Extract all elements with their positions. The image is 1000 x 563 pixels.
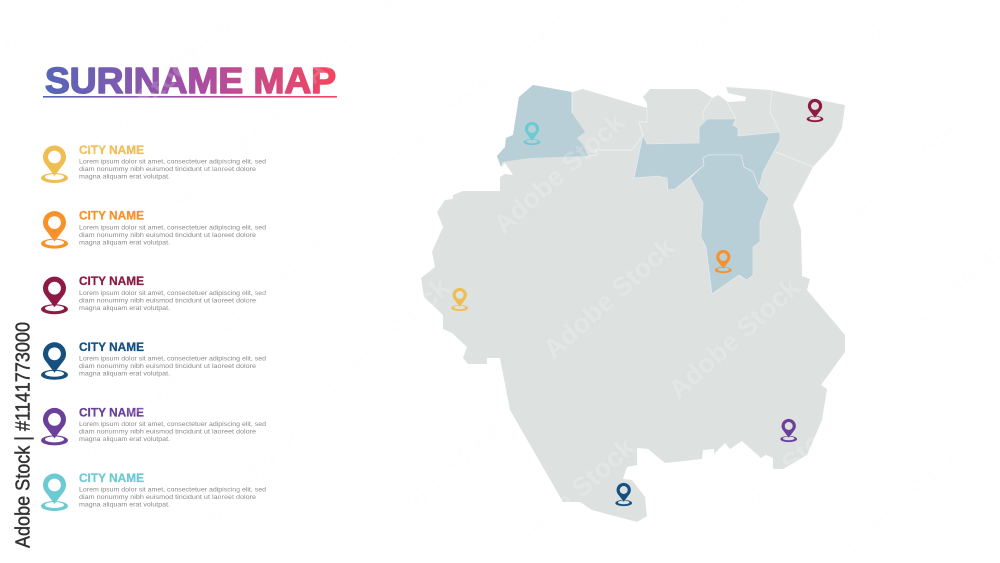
watermark pattern: Adobe Stock	[828, 106, 971, 240]
city item: yellow: CITY NAME	[79, 145, 144, 157]
city item: orange: Lorem ipsum dolor sit amet, consectetuer adipiscing elit, sed	[79, 224, 266, 231]
city item: maroon: CITY NAME	[79, 276, 144, 288]
city item: cyan: CITY NAME	[79, 473, 144, 485]
city item: maroon: diam nonummy nibh euismod tincidunt ut laoreet dolore	[79, 297, 256, 304]
region: central teal	[634, 119, 780, 190]
city item: maroon	[41, 276, 266, 314]
watermark pattern: Adobe Stock	[198, 216, 341, 350]
pin: purple	[780, 419, 797, 442]
watermark pattern: Adobe Stock	[373, 406, 516, 540]
map base outline	[421, 85, 845, 522]
city item: purple	[41, 407, 266, 445]
city item: purple: magna aliquam erat volutpat.	[79, 436, 170, 443]
region: north-west teal	[497, 85, 588, 167]
city item: orange: diam nonummy nibh euismod tincidunt ut laoreet dolore	[79, 232, 256, 239]
watermark pattern: Adobe Stock	[538, 231, 681, 365]
watermark pattern: Adobe Stock	[158, 91, 301, 225]
city item: yellow	[41, 145, 266, 183]
city item: cyan: magna aliquam erat volutpat.	[79, 502, 170, 509]
watermark pattern: Adobe Stock	[53, 356, 196, 490]
watermark pattern: Adobe Stock	[363, 56, 506, 190]
watermark pattern: Adobe Stock	[168, 421, 311, 555]
city item: maroon: magna aliquam erat volutpat.	[79, 305, 170, 312]
watermark pattern: Adobe Stock	[708, 406, 851, 540]
city item: cyan: diam nonummy nibh euismod tincidunt ut laoreet dolore	[79, 494, 256, 501]
city list	[41, 145, 266, 511]
pin: blue	[615, 483, 632, 506]
title: SURINAME MAP	[45, 60, 336, 101]
city item: blue: CITY NAME	[79, 342, 144, 354]
pin: maroon	[807, 99, 823, 122]
watermark pattern: Adobe Stock	[498, 431, 641, 563]
vertical stock label: Adobe Stock | #1141773000	[12, 322, 34, 548]
city item: blue	[41, 342, 266, 380]
pin: yellow	[451, 288, 468, 311]
city item: purple: Lorem ipsum dolor sit amet, consectetuer adipiscing elit, sed	[79, 421, 266, 428]
city item: cyan: Lorem ipsum dolor sit amet, consectetuer adipiscing elit, sed	[79, 487, 266, 494]
city item: orange: CITY NAME	[79, 211, 144, 223]
city item: purple: CITY NAME	[79, 407, 144, 419]
city item: purple: diam nonummy nibh euismod tincidunt ut laoreet dolore	[79, 429, 256, 436]
region borders	[572, 90, 813, 167]
city item: blue: Lorem ipsum dolor sit amet, consectetuer adipiscing elit, sed	[79, 356, 266, 362]
city item: yellow: diam nonummy nibh euismod tincidunt ut laoreet dolore	[79, 166, 256, 173]
city item: yellow: Lorem ipsum dolor sit amet, consectetuer adipiscing elit, sed	[79, 159, 266, 166]
watermark pattern: Adobe Stock	[663, 271, 806, 405]
watermark pattern: Adobe Stock	[63, 41, 206, 175]
city item: blue: diam nonummy nibh euismod tincidunt ut laoreet dolore	[79, 363, 256, 370]
city item: orange: magna aliquam erat volutpat.	[79, 239, 170, 246]
watermark pattern: Adobe Stock	[313, 271, 456, 405]
city item: maroon: Lorem ipsum dolor sit amet, consectetuer adipiscing elit, sed	[79, 290, 266, 297]
pin: orange	[715, 250, 732, 273]
map: Suriname	[421, 85, 845, 522]
city item: blue: magna aliquam erat volutpat.	[79, 370, 170, 378]
map pins	[451, 99, 823, 506]
region: southern teal	[690, 155, 769, 294]
city item: yellow: magna aliquam erat volutpat.	[79, 174, 170, 181]
watermark pattern: Adobe Stock	[833, 431, 976, 563]
watermark pattern: Adobe Stock	[488, 106, 631, 240]
city item: cyan	[41, 473, 266, 511]
pin: cyan	[524, 122, 540, 145]
city item: orange	[41, 211, 266, 249]
